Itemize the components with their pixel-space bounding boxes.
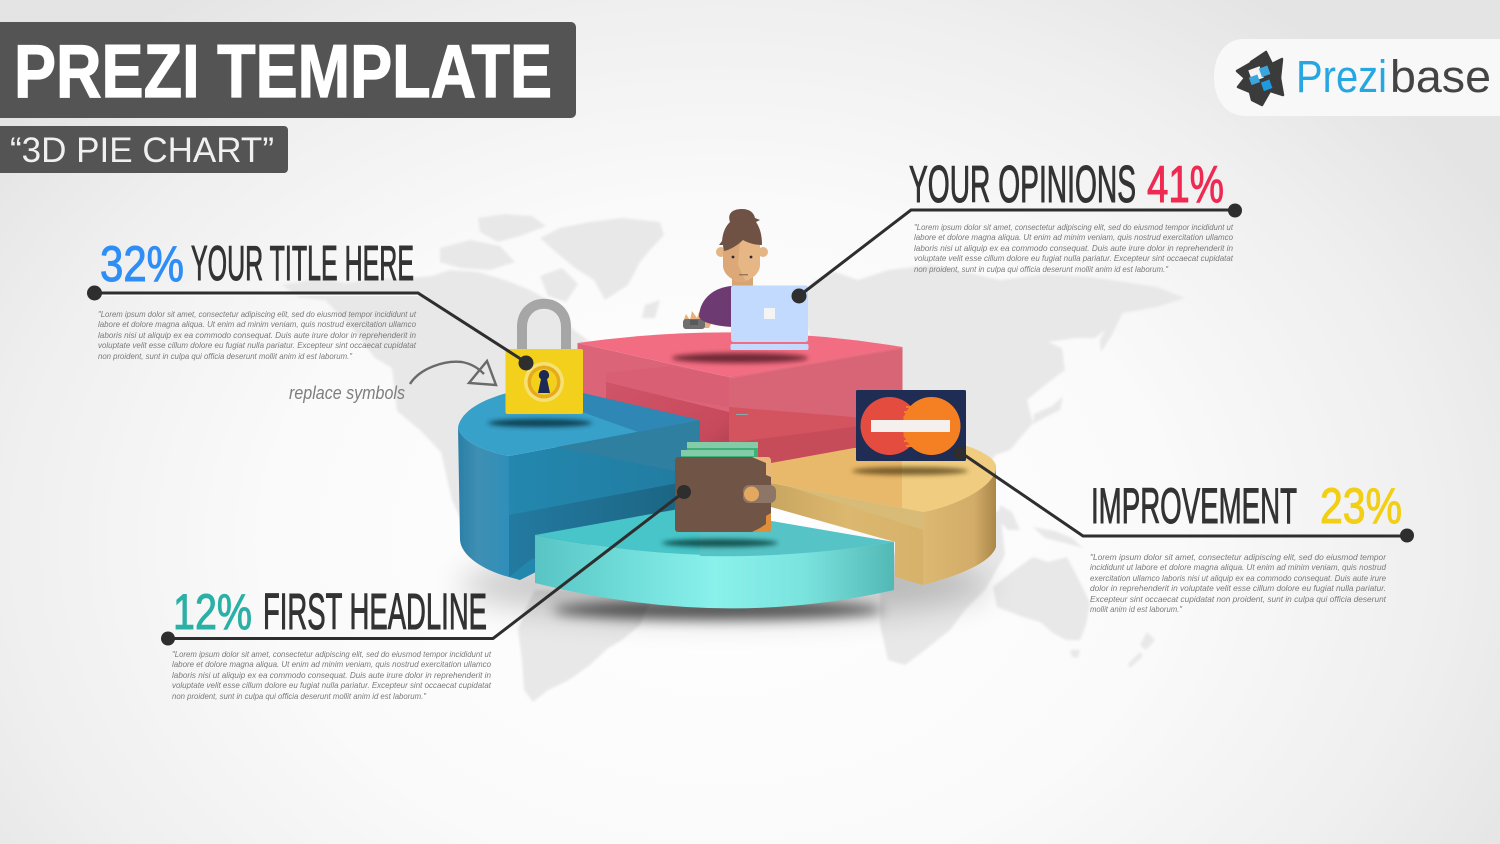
heading: 32% your title here [100,236,414,292]
text block: bottom left: "Lorem ipsum dolor sit amet, consectetur adipiscing elit, sed do eiusmod tempor incididunt ut [172,649,492,659]
icon: hand-drawn arrow [410,361,496,385]
laptop [730,286,808,350]
pie ground shadow [460,551,990,620]
icon: wallet [662,442,778,547]
icon: logo star [1237,52,1283,105]
logo: Prezibase [1214,39,1500,116]
hand and mouse [683,311,711,329]
text block: right: incididunt ut labore et dolore magna aliqua. Ut enim ad minim veniam, quis nostrud [1090,562,1386,572]
heading: improvement 23%: IMPROVEMENT [1091,478,1297,534]
text block: left: laboris nisi ut aliquip ex ea commodo consequat. Duis aute irure dolor in reprehenderit in [98,330,416,340]
leader line: right [953,446,1414,542]
heading: 12% first headline [173,583,487,640]
leader line: left [87,286,534,370]
text block: right: exercitation ullamco laboris nisi ut aliquip ex ea commodo consequat. Duis aute irure [1090,573,1386,583]
icon: padlock [488,304,592,427]
text block: top right: voluptate velit esse cillum dolore eu fugiat nulla pariatur. Excepteur sint occaecat cupidatat [914,253,1234,263]
text block: top right: laboris nisi ut aliquip ex ea commodo consequat. Duis aute irure dolor in reprehenderit in [914,243,1233,253]
ears [716,247,726,257]
leader line: top right [792,204,1242,304]
logo: Prezibase: Prezi [1296,51,1387,102]
text block: left: labore et dolore magna aliqua. Ut enim ad minim veniam, quis nostrud exercitation ullamco [98,319,416,329]
text block: top right: non proident, sunt in culpa qui officia deserunt mollit anim id est laborum." [914,264,1169,274]
neck [732,276,753,288]
text block: right: mollit anim id est laborum." [1090,604,1183,614]
text block: left [98,309,417,361]
text block: top right: labore et dolore magna aliqua. Ut enim ad minim veniam, quis nostrud exercitation ullamco [914,232,1233,242]
hair [719,209,762,251]
text block: right: Excepteur sint occaecat cupidatat non proident, sunt in culpa qui officia deserunt [1090,594,1387,604]
heading: 12% first headline: 12% [173,584,252,640]
note: replace symbols [289,361,496,403]
slice: gold 23% [771,445,996,585]
heading: 12% first headline: FIRST HEADLINE [263,583,487,640]
face [723,240,760,282]
3D pie chart [458,332,996,620]
text block: bottom left [172,649,492,701]
slice: blue 32% [458,390,700,580]
icon: person with laptop [672,209,808,363]
text block: bottom left: voluptate velit esse cillum dolore eu fugiat nulla pariatur. Excepteur sint occaecat cupidatat [172,680,492,690]
text block: right [1090,552,1387,614]
text block: bottom left: labore et dolore magna aliqua. Ut enim ad minim veniam, quis nostrud exercitation ullamco [172,659,491,669]
title banner: PREZI TEMPLATE [14,29,552,113]
text block: left: "Lorem ipsum dolor sit amet, consectetur adipiscing elit, sed do eiusmod tempor incididunt ut [98,309,417,319]
text block: left: non proident, sunt in culpa qui officia deserunt mollit anim id est laborum." [98,351,353,361]
eyes and mouth [732,256,734,258]
text block: bottom left: non proident, sunt in culpa qui officia deserunt mollit anim id est laborum." [172,691,427,701]
shirt [699,286,732,327]
world map [282,214,1185,702]
heading: 32% your title here: YOUR TITLE HERE [191,237,414,291]
slice: teal 12% [535,507,894,608]
note: replace symbols: replace symbols [289,383,405,403]
leader line: bottom left [161,485,691,646]
logo: Prezibase: base [1390,51,1491,102]
heading: your opinions 41%: YOUR OPINIONS [909,156,1136,214]
text block: bottom left: laboris nisi ut aliquip ex ea commodo consequat. Duis aute irure dolor in reprehenderit in [172,670,491,680]
text block: left: voluptate velit esse cillum dolore eu fugiat nulla pariatur. Excepteur sint occaecat cupidatat [98,340,417,350]
slice: red 41% [578,332,902,470]
icon: credit card [852,390,968,475]
text block: top right [914,222,1234,274]
text block: right: dolor in reprehenderit in voluptate velit esse cillum dolore eu fugiat nulla pariatur. [1090,583,1386,593]
subtitle banner: “3D PIE CHART” [10,131,274,170]
heading: 32% your title here: 32% [100,236,184,292]
heading: your opinions 41%: 41% [1147,156,1224,214]
text block: top right: "Lorem ipsum dolor sit amet, consectetur adipiscing elit, sed do eiusmod tempor incididunt ut [914,222,1234,232]
heading: improvement 23%: 23% [1320,478,1402,534]
text block: right: "Lorem ipsum dolor sit amet, consectetur adipiscing elit, sed do eiusmod tempor [1090,552,1387,562]
